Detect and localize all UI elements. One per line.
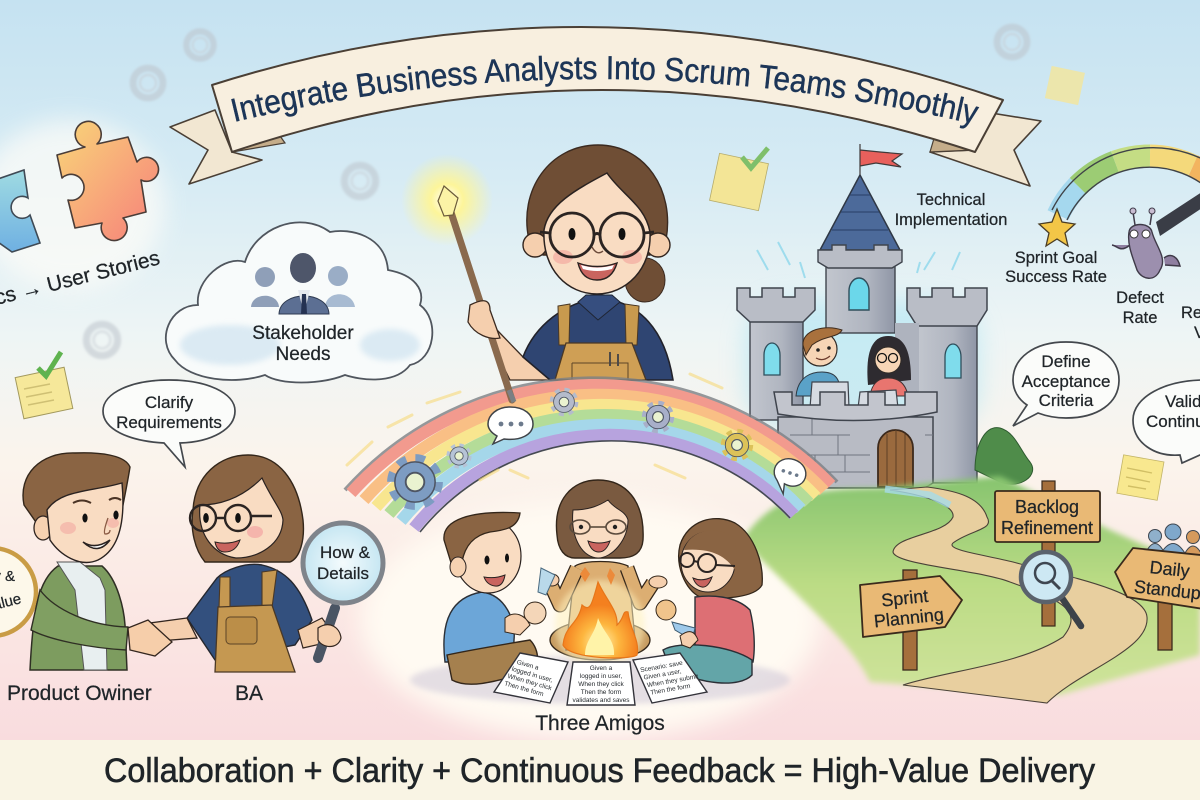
callout: define acceptance criteria [1013, 342, 1119, 426]
acceptance paper: centre: logged in user, [580, 673, 622, 680]
face [573, 500, 628, 558]
acceptance paper: centre: Given a [590, 665, 613, 672]
grass [742, 476, 1200, 695]
tower battlement [818, 245, 902, 268]
icon: defect bug [1112, 208, 1180, 278]
mouth [578, 263, 617, 280]
decorative gear: upper left [133, 68, 163, 98]
sign: daily standup: Daily [1149, 557, 1191, 581]
sign: backlog refinement: Refinement [1001, 518, 1093, 538]
left tower [737, 288, 815, 420]
panel: title banner [169, 26, 1042, 187]
icon: star [1039, 209, 1075, 246]
icon: yellow gear [724, 432, 750, 458]
label: needs: Needs [276, 344, 330, 365]
tower roof [820, 175, 900, 250]
right tower [907, 288, 987, 483]
bush [975, 428, 1033, 484]
decorative gear: left [86, 324, 118, 356]
face [47, 483, 123, 562]
panel: central BA [401, 145, 673, 380]
icon: large blue gear [392, 459, 438, 505]
icon: wand and hand [438, 186, 514, 402]
icon: team [1146, 524, 1200, 555]
gauge arc [1058, 156, 1200, 215]
right forearm [298, 618, 338, 648]
rays [757, 242, 960, 278]
label: implementation: Implementation [895, 211, 1007, 229]
face [544, 173, 650, 294]
icon: yellow-red puzzle piece [57, 121, 158, 241]
glasses [190, 505, 272, 531]
label: technical: Technical [917, 191, 985, 209]
right ribbon tail [930, 112, 1041, 186]
icon: how and details magnifier: How & [320, 543, 371, 562]
acceptance paper: left: When they click [507, 673, 553, 692]
callout: define acceptance criteria: Define [1041, 352, 1091, 371]
developer man [796, 328, 842, 396]
decorative gear: top right [997, 27, 1027, 57]
icon: how and details magnifier [303, 523, 383, 658]
label: three amigos: Three Amigos [535, 712, 665, 735]
bridge wall behind people [895, 323, 919, 393]
sticky note with check: near castle [710, 148, 768, 211]
icon: chat bubble right [768, 455, 810, 499]
sparks [347, 374, 722, 480]
title: Integrate Business Analysts Into Scrum Teams Smoothly [231, 56, 980, 128]
hair [556, 480, 643, 558]
shirt [187, 564, 312, 660]
panel: castle, technical implementation [737, 144, 1007, 488]
sign: sprint planning [860, 570, 962, 670]
decorative gear: top left [186, 31, 214, 59]
callout: define acceptance criteria: Criteria [1039, 391, 1094, 410]
acceptance paper: right [633, 653, 707, 703]
character: BA shaking hands [128, 455, 338, 672]
white glow: centre [360, 500, 820, 740]
ears [523, 233, 547, 257]
acceptance paper: centre: When they click [578, 681, 625, 688]
acceptance paper: left: Then the form [503, 680, 544, 698]
shirt [57, 562, 107, 670]
apron [555, 343, 646, 380]
label: rate: Rate [1123, 309, 1157, 327]
dirt path [890, 487, 1147, 703]
arm to handshake [145, 618, 197, 642]
label: defect: Defect [1116, 289, 1164, 307]
acceptance paper: right: Given a user, [643, 668, 682, 682]
ground shadow [410, 656, 790, 704]
right amigo [656, 519, 762, 683]
ribbon body [212, 27, 1003, 152]
icon: why and value clock [0, 548, 36, 636]
arm [31, 590, 128, 650]
sign: daily standup: Standup [1133, 577, 1200, 603]
laptops [810, 382, 898, 408]
panel: stakeholder needs cloud [166, 222, 432, 382]
acceptance paper: right: Scenario: save [640, 660, 684, 674]
wand glow [401, 154, 493, 246]
sticky note: top right [1045, 66, 1085, 105]
arms [550, 568, 577, 605]
face [200, 478, 283, 558]
label: success rate: Success Rate [1005, 268, 1107, 286]
callout: clarify requirements: Clarify [145, 393, 194, 412]
castle glow [745, 300, 980, 430]
character: product owner [23, 453, 130, 670]
callout: clarify requirements [103, 380, 235, 467]
footer band [0, 740, 1200, 800]
ribbon folds [232, 135, 975, 152]
acceptance paper: centre: validates and saves [572, 697, 630, 704]
icon: chat bubble left [488, 407, 533, 444]
door [878, 430, 913, 487]
sign: backlog refinement [995, 481, 1100, 626]
apron straps [558, 304, 639, 345]
ear [34, 516, 52, 540]
campfire [555, 567, 645, 670]
footer tagline: Collaboration + Clarity + Continuous Feedback = High-Value Delivery [104, 752, 1095, 790]
developer woman [867, 336, 911, 396]
hair back [527, 145, 668, 255]
legs [550, 620, 650, 660]
acceptance paper: left [494, 653, 568, 703]
sign: backlog refinement: Backlog [1015, 497, 1079, 517]
panel: rainbow bridge [345, 374, 837, 532]
icon: purple-grey gear [644, 404, 672, 430]
torso [566, 562, 636, 650]
left amigo [444, 512, 546, 684]
sticky note: right [1117, 455, 1164, 500]
icon: blue puzzle piece [0, 170, 40, 252]
callout: define acceptance criteria: Acceptance [1022, 372, 1110, 391]
bun [625, 258, 665, 302]
front wall [778, 417, 933, 488]
icon: grey gear [552, 390, 576, 414]
front battlement [774, 392, 937, 421]
tower window [849, 278, 869, 310]
body [523, 298, 673, 380]
icon: magnifier on path [1021, 552, 1081, 626]
callout: clarify requirements: Requirements [116, 413, 222, 432]
left ribbon tail [170, 110, 262, 184]
glasses [540, 213, 654, 257]
eyes [568, 228, 576, 240]
collar [578, 295, 620, 320]
sign: sprint planning: Planning [873, 604, 945, 631]
icon: stakeholders [251, 253, 355, 314]
icon: how and details magnifier: Details [317, 564, 369, 583]
panel: metrics gauge [1005, 148, 1200, 342]
callout: validate continuously [1133, 380, 1200, 463]
panel: three amigos campfire [410, 480, 790, 735]
centre tower [826, 263, 895, 333]
hair [192, 455, 303, 562]
centre amigo [538, 480, 667, 660]
acceptance paper: right: When they submit [646, 673, 699, 689]
panel: puzzle pieces, epics to user stories [0, 120, 165, 317]
decorative gear: near wand [344, 165, 376, 197]
acceptance paper: centre [567, 662, 635, 705]
sign: sprint planning: Sprint [880, 586, 929, 611]
handshake [128, 620, 172, 656]
sign: daily standup [1115, 524, 1200, 650]
cardigan [30, 566, 127, 670]
cloud [166, 222, 432, 382]
panel: path and grass hill [742, 428, 1200, 703]
acceptance paper: centre: Then the form [581, 689, 621, 696]
acceptance paper: left: logged in user, [511, 666, 554, 684]
apron straps [219, 570, 277, 608]
sticky note with check: left [15, 352, 73, 419]
arm [490, 330, 550, 380]
label: product owner: Product Owiner [7, 682, 152, 705]
flag [860, 144, 902, 175]
hands [545, 574, 559, 586]
apron [215, 605, 295, 672]
acceptance paper: left: Given a [516, 659, 540, 672]
hair back [23, 453, 130, 535]
icon: small gear [448, 446, 470, 466]
acceptance paper: right: Then the form [650, 683, 691, 697]
label: BA: BA [235, 682, 263, 705]
gauge needle [1156, 190, 1200, 236]
label: sprint goal: Sprint Goal [1015, 249, 1097, 267]
label: stakeholder: Stakeholder [252, 323, 354, 344]
